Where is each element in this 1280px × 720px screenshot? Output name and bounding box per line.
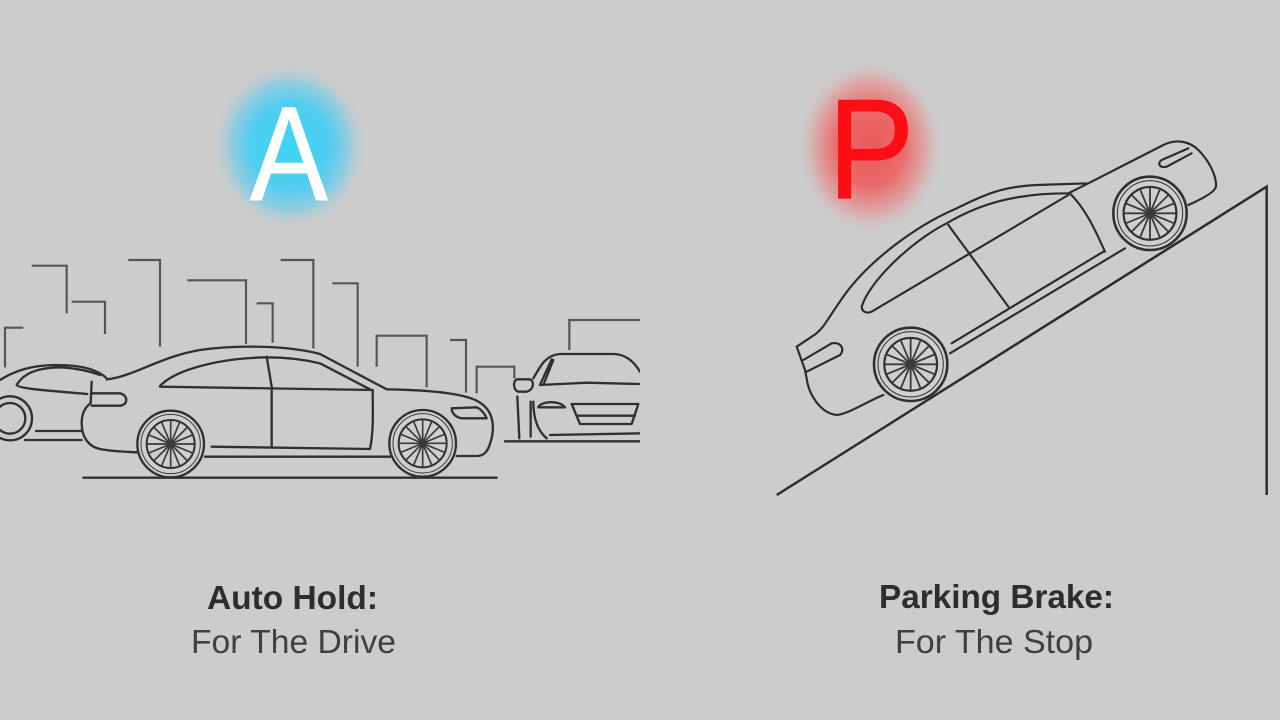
icon: glowing letter P xyxy=(796,59,944,235)
main car xyxy=(82,347,497,478)
panel: parking brake xyxy=(777,59,1267,660)
panel: auto hold xyxy=(0,62,640,660)
car parked on right xyxy=(505,354,640,441)
illustration: car parked on slope xyxy=(777,141,1267,495)
icon: glowing letter A xyxy=(212,62,368,230)
car body xyxy=(797,141,1216,415)
icon: glowing letter P: P xyxy=(828,69,914,228)
text: for the drive: For The Drive xyxy=(191,623,396,660)
heading: parking brake: Parking Brake: xyxy=(879,578,1114,615)
illustration: car in city traffic xyxy=(0,260,640,478)
wheel front xyxy=(1113,177,1187,250)
city skyline xyxy=(5,260,640,393)
slope xyxy=(777,187,1267,495)
icon: glowing letter A: A xyxy=(250,78,328,229)
car behind on left xyxy=(0,365,107,440)
heading: auto hold: Auto Hold: xyxy=(207,579,378,616)
text: for the stop: For The Stop xyxy=(895,623,1093,660)
wheel rear xyxy=(874,328,947,401)
